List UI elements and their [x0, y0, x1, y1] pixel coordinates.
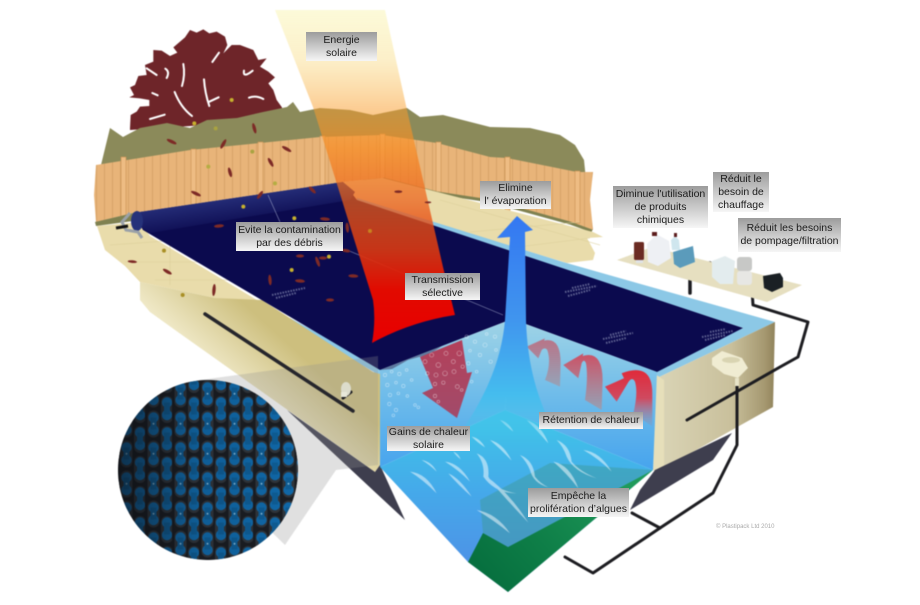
label: solar energy: solaire: [326, 46, 357, 58]
jar: [634, 242, 644, 260]
label: debris: Evite la contamination: [238, 224, 341, 236]
label: heating: Réduit le: [720, 172, 762, 184]
seam line: [268, 195, 503, 315]
pump: [763, 273, 783, 292]
label: evaporation: l' évaporation: [484, 195, 547, 207]
label: chemicals: [613, 186, 708, 228]
chemicals: [634, 232, 695, 268]
fence: [94, 134, 593, 231]
label: heating: besoin de: [718, 186, 764, 198]
label: solar heat gain: Gains de chaleur: [389, 426, 468, 438]
label: pumping: de pompage/filtration: [740, 235, 839, 247]
label: selective transmission: [405, 273, 480, 300]
label: algae: prolifération d’algues: [530, 502, 627, 514]
heater: [712, 256, 735, 284]
pool base: [287, 410, 732, 520]
tree: [129, 29, 282, 130]
jug: [647, 235, 671, 266]
label: algae: [528, 488, 629, 517]
label: heat retention: Rétention de chaleur: [543, 414, 639, 426]
label: evaporation: Elimine: [498, 182, 533, 194]
water walls: [380, 319, 657, 470]
magnified bubble cover: [118, 380, 298, 560]
label: selective transmission: sélective: [422, 286, 463, 298]
return heat arrows: [527, 338, 652, 427]
equipment table: [617, 247, 802, 302]
solar gain arrow: [420, 340, 472, 418]
hedge: [100, 102, 586, 180]
label: solar energy: Energie: [323, 34, 360, 46]
water ripples: [410, 420, 612, 533]
label: pumping: [738, 218, 841, 252]
pipe fitting: [341, 382, 351, 397]
right wall: [653, 322, 775, 472]
pipes: [205, 263, 808, 573]
bubbles: [383, 333, 497, 417]
cover: [133, 182, 743, 372]
label: heating: [713, 172, 769, 212]
green floor: [468, 470, 653, 592]
pool rim: [357, 198, 775, 378]
label: heating: chauffage: [718, 198, 764, 210]
algae tint: [480, 463, 653, 547]
deck: [97, 178, 603, 303]
label: chemicals: chimiques: [637, 214, 684, 226]
label: heat retention: [539, 412, 643, 429]
small bottle: [671, 236, 680, 250]
cover prints: [272, 284, 733, 343]
sun beam: [275, 10, 455, 343]
pool illustration: [93, 10, 810, 593]
label: algae: Empêche la: [551, 490, 606, 502]
copyright: © Plastipack Ltd 2010: [716, 524, 774, 530]
leaves: [128, 98, 431, 302]
skimmer: [712, 351, 748, 386]
label: pumping: Réduit les besoins: [747, 222, 832, 234]
blue box: [673, 246, 695, 268]
label: debris: [236, 222, 343, 251]
label: solar heat gain: solaire: [413, 438, 444, 450]
rolled cover band: [133, 182, 355, 233]
filter: [737, 257, 752, 285]
cone from magnifier: [200, 356, 378, 545]
label: evaporation: [480, 181, 551, 209]
label: solar energy: [306, 32, 377, 61]
pool floor: [380, 410, 653, 592]
label: chemicals: de produits: [635, 200, 686, 212]
left wall: [140, 282, 380, 472]
label: debris: par des débris: [256, 236, 323, 248]
cover shadow patch: [380, 346, 442, 370]
label: solar heat gain: [387, 426, 470, 451]
label: selective transmission: Transmission: [411, 274, 474, 286]
blue evaporation arrow: [455, 216, 560, 440]
label: chemicals: Diminue l'utilisation: [616, 188, 705, 200]
roller end and crank: [116, 211, 143, 238]
